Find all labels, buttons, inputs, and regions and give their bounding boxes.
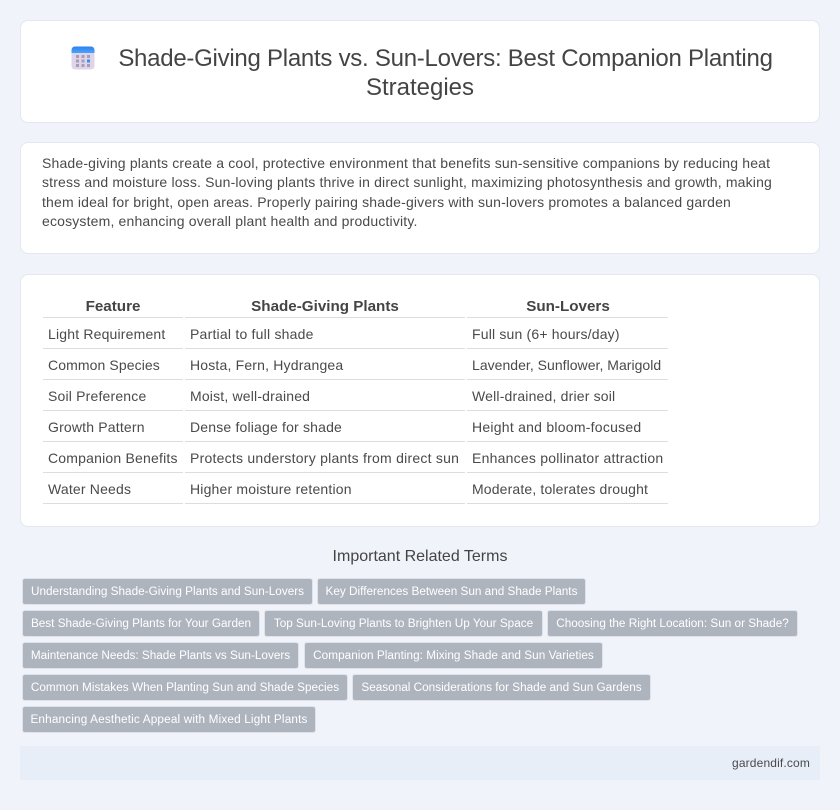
row: Water Needs: Water Needs — [48, 481, 131, 497]
row: Companion Benefits: Companion Benefits — [48, 450, 178, 466]
row: Water Needs: Higher moisture retention — [190, 481, 352, 497]
row: Soil Preference: Soil Preference — [48, 388, 146, 404]
title: Shade-Giving Plants vs. Sun-Lovers: Best Companion Planting — [118, 45, 773, 72]
table header row: Feature — [86, 298, 140, 315]
row: Water Needs: Moderate, tolerates drought — [472, 481, 648, 497]
row: Growth Pattern: Height and bloom-focused — [472, 419, 641, 435]
table header row — [86, 298, 610, 315]
tag list: related terms: Choosing the Right Location: Sun or Shade? — [556, 617, 789, 630]
tag list: related terms: Seasonal Considerations for Shade and Sun Gardens — [361, 681, 642, 694]
row: Companion Benefits — [43, 441, 668, 466]
row: Common Species — [43, 348, 668, 373]
table header row: Sun-Lovers — [526, 298, 610, 315]
row: Light Requirement: Full sun (6+ hours/day) — [472, 326, 620, 342]
text block: intro: ecosystem, enhancing overall plant health and productivity. — [42, 213, 418, 229]
tag list: related terms: Maintenance Needs: Shade Plants vs Sun-Lovers — [31, 649, 290, 662]
icon: calendar — [72, 46, 94, 70]
title — [118, 45, 773, 101]
row: Growth Pattern — [43, 410, 668, 435]
row: Soil Preference: Well-drained, drier soil — [472, 388, 615, 404]
text block: intro: Shade-giving plants create a cool, protective environment that benefits sun-sensitive companions by reducing heat — [42, 155, 770, 171]
table header row: Shade-Giving Plants — [251, 298, 399, 315]
row: Soil Preference: Moist, well-drained — [190, 388, 310, 404]
row: Light Requirement — [43, 317, 668, 342]
row: Water Needs — [43, 472, 668, 504]
row: Growth Pattern: Dense foliage for shade — [190, 419, 342, 435]
row: Companion Benefits: Enhances pollinator attraction — [472, 450, 663, 466]
row: Soil Preference — [43, 379, 668, 404]
tag list: related terms: Companion Planting: Mixing Shade and Sun Varieties — [313, 649, 594, 662]
panel: intro paragraph — [20, 142, 820, 254]
tag list: related terms: Key Differences Between Sun and Shade Plants — [326, 585, 577, 598]
footer source text: gardendif.com — [732, 756, 810, 770]
panel: header — [20, 20, 820, 123]
row: Common Species: Hosta, Fern, Hydrangea — [190, 357, 343, 373]
text block: intro — [42, 155, 772, 229]
tag list: related terms: Top Sun-Loving Plants to Brighten Up Your Space — [274, 617, 533, 630]
row: Companion Benefits: Protects understory plants from direct sun — [190, 450, 459, 466]
heading: related terms: Important Related Terms — [333, 548, 507, 565]
tag list: related terms: Common Mistakes When Planting Sun and Shade Species — [31, 681, 339, 694]
footer — [20, 746, 820, 780]
row: Common Species: Lavender, Sunflower, Marigold — [472, 357, 661, 373]
row: Light Requirement: Light Requirement — [48, 326, 165, 342]
row: Common Species: Common Species — [48, 357, 160, 373]
text block: intro: stress and moisture loss. Sun-loving plants thrive in direct sunlight, maximizing photosynthesis and growth, making — [42, 174, 772, 190]
tag list: related terms: Understanding Shade-Giving Plants and Sun-Lovers — [31, 585, 304, 598]
tag list: related terms — [22, 578, 798, 733]
panel: comparison table — [20, 274, 820, 527]
tag list: related terms: Enhancing Aesthetic Appeal with Mixed Light Plants — [30, 713, 308, 726]
row: Growth Pattern: Growth Pattern — [48, 419, 145, 435]
row: Light Requirement: Partial to full shade — [190, 326, 314, 342]
title: Strategies — [366, 74, 474, 101]
tag list: related terms: Best Shade-Giving Plants for Your Garden — [31, 617, 251, 630]
text block: intro: them ideal for bright, open areas. Properly pairing shade-givers with sun-lovers promotes a balanced garden — [42, 194, 731, 210]
